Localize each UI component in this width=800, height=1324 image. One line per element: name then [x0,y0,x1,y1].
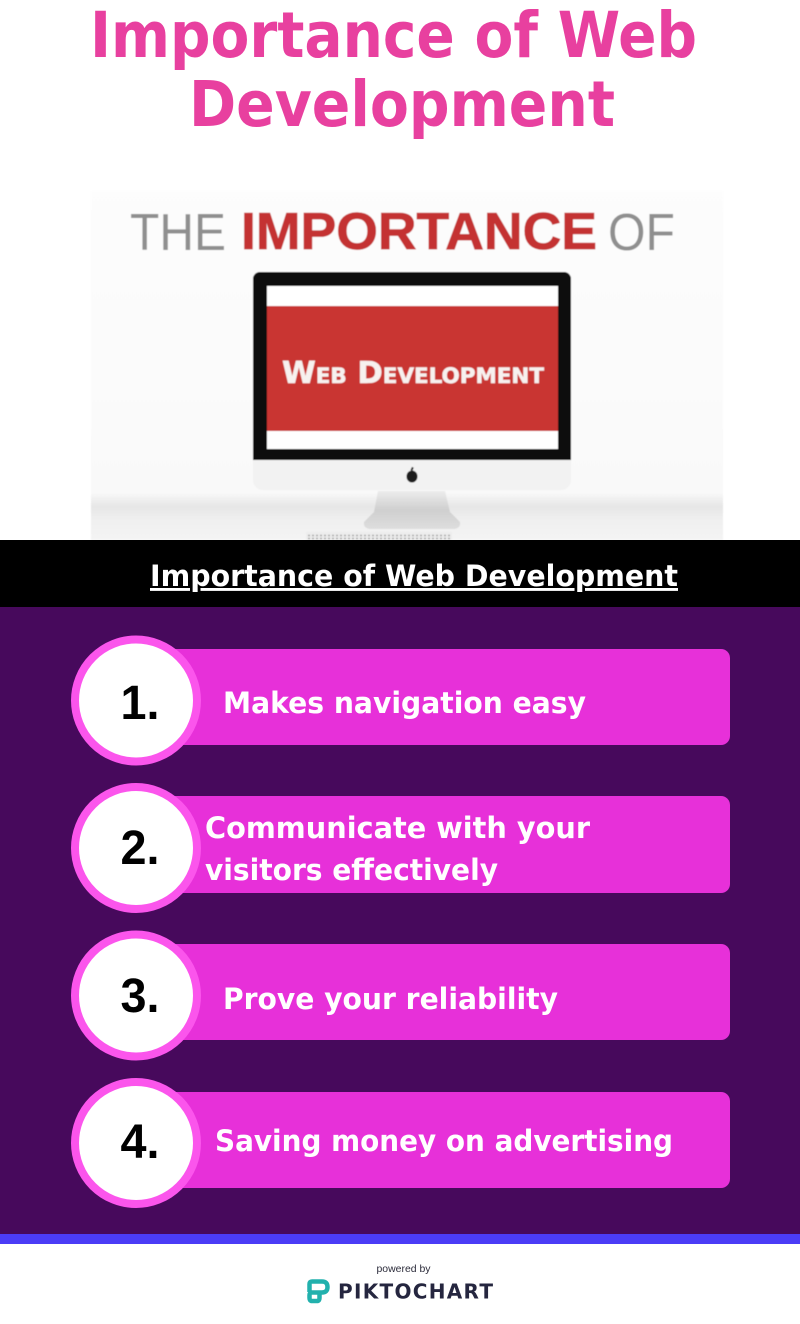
monitor stand [364,491,460,529]
label: Saving money on advertising [215,1124,673,1158]
number badge: 3. [120,970,160,1023]
title: Development [189,68,615,141]
label: Prove your reliability [223,982,558,1016]
hero headline [130,203,675,262]
bar [140,649,730,745]
label: Makes navigation easy [223,686,586,720]
number badge [75,934,197,1056]
hero headline: IMPORTANCE [241,203,597,261]
number badge [75,1082,197,1204]
number badge: 1. [120,677,160,730]
label: Communicate with your [205,811,591,845]
monitor screen text: Web Development [282,356,545,391]
blue footer stripe [0,1234,800,1244]
hero image: the importance of web development [91,191,723,540]
label [205,811,591,887]
item 3 [75,934,730,1056]
icon: piktochart logo [310,1282,328,1301]
number badge [75,787,197,909]
powered by: powered by [376,1264,430,1275]
bar [140,944,730,1040]
title [90,0,697,141]
number badge: 4. [120,1116,160,1169]
wordmark: PIKTOCHART [338,1280,493,1304]
footer branding [310,1264,493,1304]
label: visitors effectively [205,853,498,887]
keyboard [306,532,452,540]
hero headline: OF [608,204,675,262]
purple panel [0,607,800,1234]
band heading: Importance of Web Development [150,559,678,593]
item 2 [75,787,730,909]
item 4 [75,1082,730,1204]
apple logo [406,467,418,482]
hero headline: THE [130,204,226,262]
item 1 [75,640,730,762]
monitor [253,272,571,540]
black heading band [0,540,800,607]
title: Importance of Web [90,0,697,72]
bar [140,796,730,893]
number badge [75,640,197,762]
number badge: 2. [120,822,160,875]
bar [140,1092,730,1188]
